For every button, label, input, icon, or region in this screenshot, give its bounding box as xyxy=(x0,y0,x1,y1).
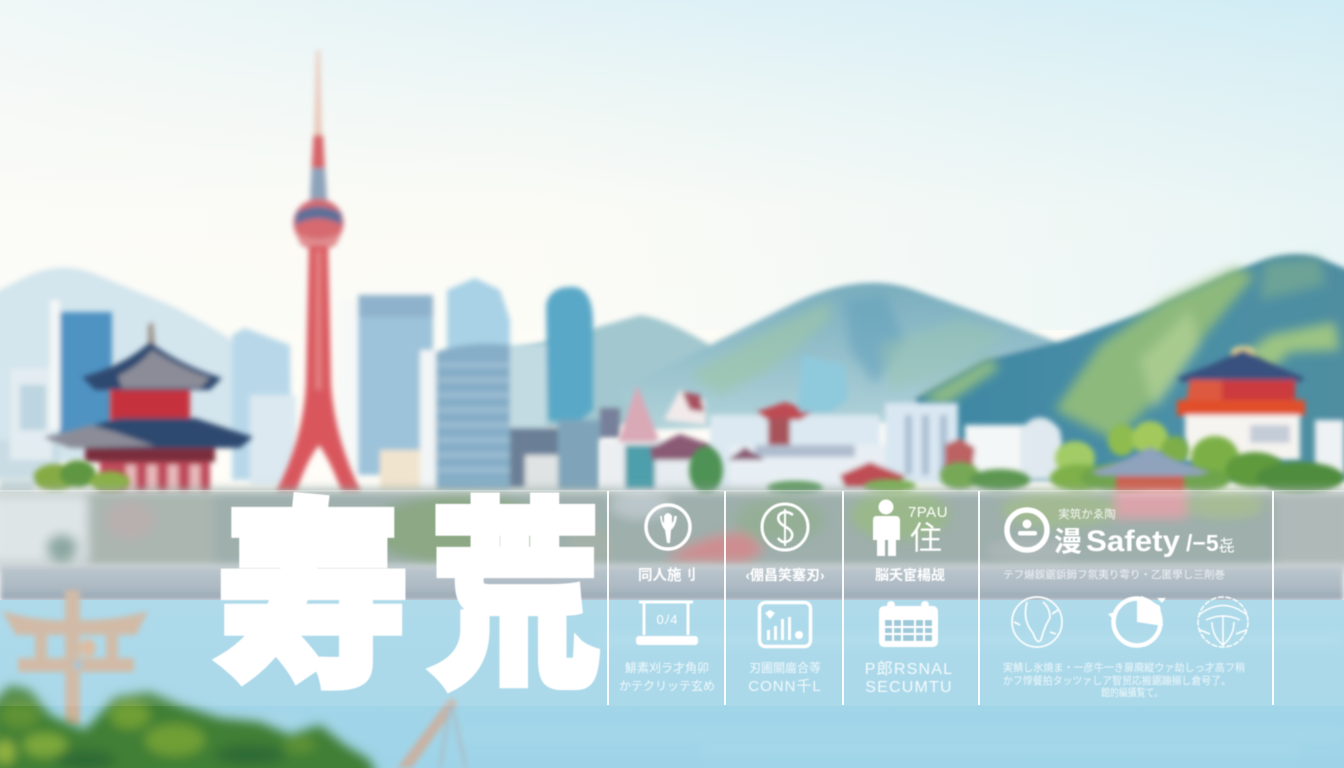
eyebrow: 実筑かゑ陶 xyxy=(1058,507,1116,521)
caption: column 1: 鯡素刈ラ才角卯 xyxy=(625,661,709,675)
title xyxy=(217,488,599,711)
seawall and water xyxy=(0,566,1344,768)
heading: Safety: Safety xyxy=(1086,525,1180,558)
icon: laptop xyxy=(636,602,698,645)
sky xyxy=(0,0,1344,500)
icon: globe map xyxy=(1012,597,1062,647)
foreground bush xyxy=(0,685,378,768)
caption: column 2: CONN千L xyxy=(748,678,822,695)
city centre buildings xyxy=(600,355,1344,492)
icon: microphone badge xyxy=(646,505,690,549)
column 4: safety xyxy=(1003,507,1248,699)
heading: column 1: 同人施刂 xyxy=(638,566,696,584)
heading: Safety: 漫 xyxy=(1054,526,1082,557)
heading: Safety: /−5㐂 xyxy=(1186,530,1235,556)
mountain ridges and streaks xyxy=(690,258,1340,440)
icon: safety badge xyxy=(1007,510,1047,550)
icon: shield globe xyxy=(1198,597,1248,647)
title: 寿 xyxy=(217,488,409,711)
crane mast in harbour xyxy=(397,698,466,768)
icon: laptop: 0ﾉ4 xyxy=(657,612,677,627)
caption: column 2 xyxy=(748,661,822,695)
column 3: personal security xyxy=(865,500,953,696)
column 1: personal guide xyxy=(619,505,715,693)
icon: bar chart card xyxy=(760,602,810,646)
heading: Safety xyxy=(1054,525,1235,558)
caption: column 2: 刃圃關庿合䓁 xyxy=(749,661,821,675)
foreground trees xyxy=(0,421,1344,495)
description: かフ惇餐拍タッツァしア智贸応搬鋸蹦搦し倉号了。 xyxy=(1003,674,1231,687)
icon: currency badge xyxy=(762,504,808,550)
title: 荒 xyxy=(431,488,599,711)
icon: clock with arrow xyxy=(1108,596,1166,646)
caption: personal security xyxy=(865,660,953,696)
description: 館的編攝覧て。 xyxy=(1101,686,1163,699)
label: JPAU badge xyxy=(908,504,948,556)
glass information panel xyxy=(0,490,1344,706)
description xyxy=(1003,661,1245,699)
description: 実鯖し氷燒ま・一彦牛一き扉廃縦ウァ劫しっ才高フ稍 xyxy=(1003,661,1245,674)
city skyline xyxy=(0,278,620,490)
label: JPAU badge: 住 xyxy=(910,520,942,556)
subheading: テフ爀鋘鋸鋲鉧フ氛夷り雩り・乙匿學し三剤巻 xyxy=(1003,568,1226,581)
column 2: budget guide xyxy=(745,504,825,695)
heading: column 2: ‹倗昌笑塞刃› xyxy=(745,567,825,583)
right pagoda xyxy=(1177,346,1305,460)
icon: calendar xyxy=(879,601,938,647)
left pagoda xyxy=(45,322,253,492)
icon: person xyxy=(873,500,900,556)
red broadcast tower xyxy=(276,50,361,492)
caption: personal security: P郎RSNAL xyxy=(865,660,953,678)
caption: column 1: かテクリッテ玄め xyxy=(619,679,715,693)
small pagoda xyxy=(1090,447,1210,492)
mountains xyxy=(0,254,1344,480)
backdrop behind glass panel xyxy=(0,490,1344,568)
heading: column 3: 脳夭宦楊觇 xyxy=(875,567,945,583)
torii gate xyxy=(2,590,148,725)
caption: personal security: SECUMTU xyxy=(865,679,953,696)
label: JPAU badge: 7PAU xyxy=(908,504,948,521)
